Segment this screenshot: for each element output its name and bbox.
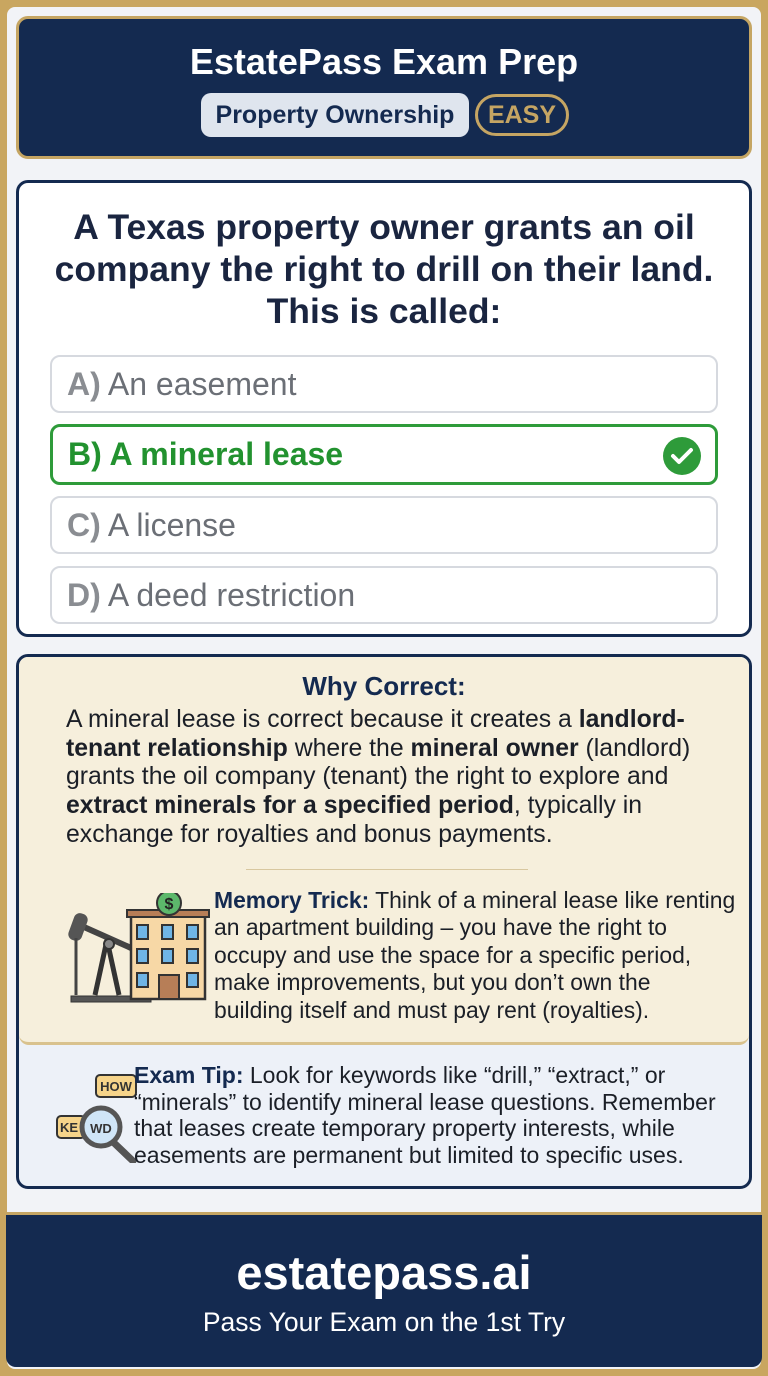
badge: difficulty bbox=[475, 94, 569, 136]
explanation text: extract minerals for a specified period, typically in bbox=[66, 792, 642, 819]
exam tip text: easements are permanent but limited to specific uses. bbox=[134, 1142, 684, 1168]
question text: A Texas property owner grants an oil bbox=[73, 207, 695, 247]
title: EstatePass Exam Prep bbox=[190, 41, 578, 82]
option A: A) An easement bbox=[67, 366, 296, 402]
option D: D) A deed restriction bbox=[67, 577, 355, 613]
option A bbox=[50, 355, 718, 413]
icon: magnifier keywords bbox=[56, 1074, 137, 1163]
memory trick text: make improvements, but you don’t own the bbox=[214, 969, 650, 995]
question text: This is called: bbox=[267, 291, 501, 331]
question text: company the right to drill on their land. bbox=[55, 249, 713, 289]
option D bbox=[50, 566, 718, 624]
icon: magnifier keywords: WD bbox=[90, 1121, 112, 1136]
icon: magnifier keywords: HOW bbox=[100, 1079, 133, 1094]
icon: magnifier keywords: KE bbox=[60, 1120, 78, 1135]
question text bbox=[55, 207, 713, 331]
icon: oil pump and building: $ bbox=[165, 896, 174, 913]
why correct section bbox=[19, 657, 749, 1045]
explanation panel bbox=[16, 654, 752, 1189]
explanation text bbox=[66, 706, 690, 848]
explanation text: grants the oil company (tenant) the right to explore and bbox=[66, 763, 668, 790]
icon: check bbox=[663, 437, 701, 475]
explanation text: A mineral lease is correct because it creates a landlord- bbox=[66, 706, 685, 733]
option C: C) A license bbox=[67, 507, 236, 543]
badge: difficulty: EASY bbox=[488, 101, 556, 129]
explanation text: exchange for royalties and bonus payments. bbox=[66, 821, 553, 848]
memory trick text: occupy and use the space for a specific period, bbox=[214, 942, 691, 968]
badge: category: Property Ownership bbox=[216, 101, 454, 129]
footer bbox=[6, 1212, 762, 1367]
footer tagline: Pass Your Exam on the 1st Try bbox=[203, 1307, 565, 1337]
header bbox=[16, 16, 752, 159]
footer brand: estatepass.ai bbox=[236, 1246, 532, 1299]
icon: oil pump and building bbox=[68, 893, 210, 1002]
exam tip text bbox=[134, 1062, 716, 1168]
option C bbox=[50, 496, 718, 554]
exam tip text: “minerals” to identify mineral lease questions. Remember bbox=[134, 1089, 716, 1115]
badge: category bbox=[201, 93, 469, 137]
option B correct: B) A mineral lease bbox=[68, 436, 343, 472]
memory trick text: an apartment building – you have the right to bbox=[214, 914, 667, 940]
explanation text: tenant relationship where the mineral owner (landlord) bbox=[66, 735, 690, 762]
memory trick text: building itself and must pay rent (royalties). bbox=[214, 997, 649, 1023]
exam tip text: that leases create temporary property interests, while bbox=[134, 1115, 675, 1141]
question card bbox=[16, 180, 752, 637]
option B correct bbox=[50, 424, 718, 485]
heading: why correct: Why Correct: bbox=[302, 671, 466, 701]
memory trick text bbox=[214, 887, 735, 1023]
memory trick text: Memory Trick: Think of a mineral lease like renting bbox=[214, 887, 735, 913]
exam tip text: Exam Tip: Look for keywords like “drill,” “extract,” or bbox=[134, 1062, 665, 1088]
